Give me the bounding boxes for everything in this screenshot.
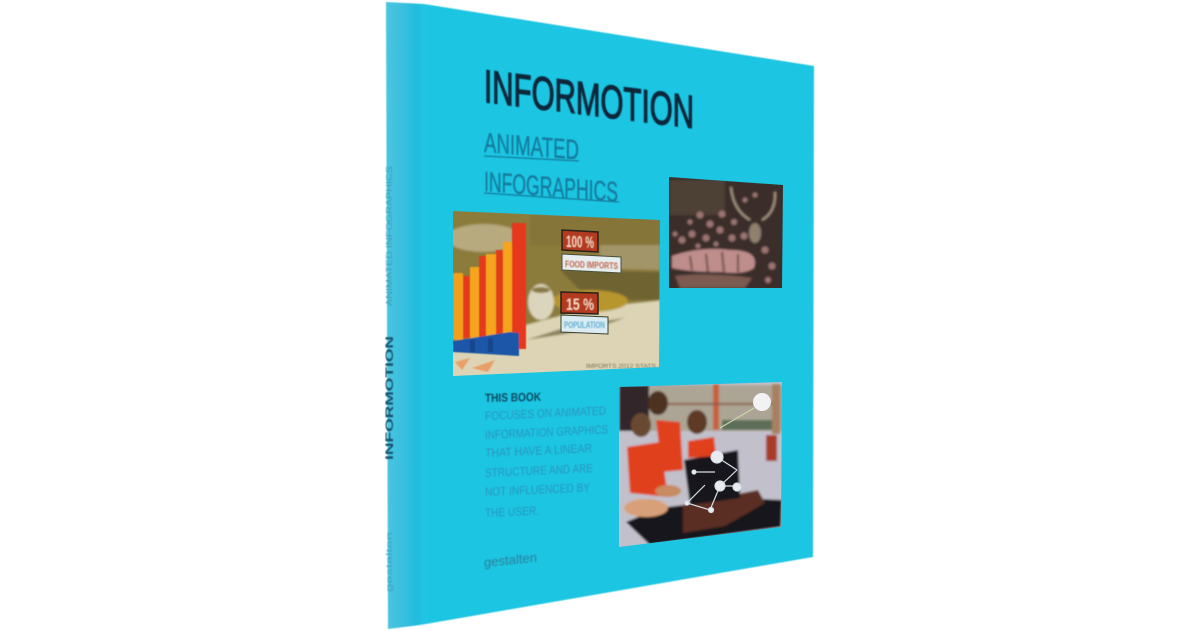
description paragraph: INFORMATION GRAPHICS xyxy=(485,422,608,442)
label: population: POPULATION xyxy=(564,320,605,330)
network graphic xyxy=(685,393,771,512)
description paragraph xyxy=(485,404,608,520)
label: food imports: FOOD IMPORTS xyxy=(565,259,618,271)
publisher name: gestalten xyxy=(484,550,537,570)
subtitle line 2: INFOGRAPHICS xyxy=(484,166,618,208)
label: 100 percent: 100 % xyxy=(566,232,594,252)
spine subtitle: ANIMATED INFOGRAPHICS xyxy=(385,166,394,306)
subtitle line 1: ANIMATED xyxy=(484,127,579,166)
description paragraph: THE USER. xyxy=(485,504,539,520)
subtitle line 2 xyxy=(484,166,619,208)
photo: deer and lips xyxy=(669,177,783,288)
description paragraph: STRUCTURE AND ARE xyxy=(485,461,593,480)
label: food imports xyxy=(562,254,621,273)
title: INFORMOTION xyxy=(484,60,694,138)
book cover xyxy=(386,2,814,629)
description paragraph: THAT HAVE A LINEAR xyxy=(485,441,592,460)
description paragraph: NOT INFLUENCED BY xyxy=(485,480,590,499)
body text xyxy=(485,390,608,520)
spine publisher: gestalten xyxy=(385,532,394,592)
subtitle line 1 xyxy=(484,127,579,166)
label: 100 percent xyxy=(562,230,598,252)
spine title: INFORMOTION xyxy=(384,336,396,460)
box xyxy=(684,450,740,505)
children xyxy=(648,391,668,415)
description paragraph: FOCUSES ON ANIMATED xyxy=(485,404,606,423)
label: 15 percent: 15 % xyxy=(566,295,594,314)
mat xyxy=(626,498,782,545)
photo: children with box xyxy=(615,380,785,550)
photo caption: IMPORTS 2012 STATS xyxy=(586,364,656,370)
infographic: book cover in perspective xyxy=(384,1,815,630)
this book heading: THIS BOOK xyxy=(485,390,541,405)
label: population xyxy=(561,315,608,334)
bars xyxy=(453,223,526,372)
photo: bar chart on table xyxy=(453,211,660,376)
label: 15 percent xyxy=(561,292,598,314)
